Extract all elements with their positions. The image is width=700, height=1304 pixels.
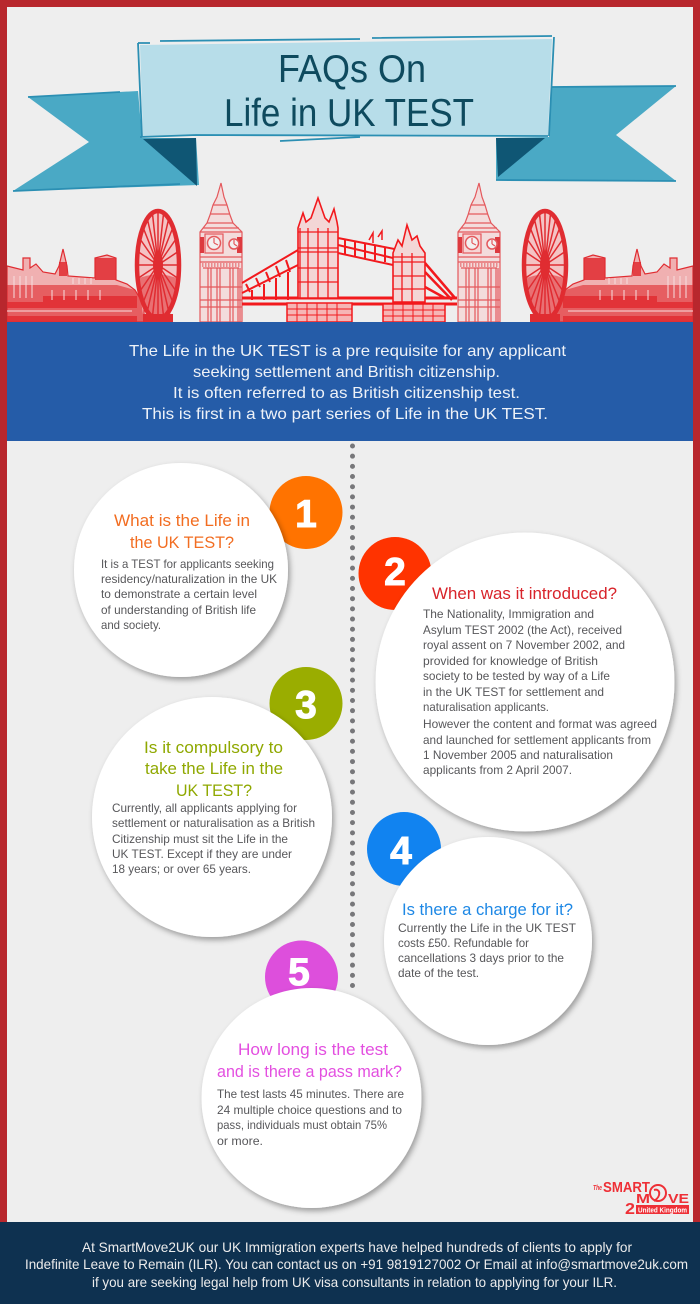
heading 5: and is there a pass mark? — [217, 1062, 402, 1081]
body 1: residency/naturalization in the UK — [101, 572, 277, 586]
body 4: costs £50. Refundable for — [398, 936, 529, 950]
heading 5 — [217, 1040, 402, 1081]
heading 1: the UK TEST? — [130, 533, 234, 552]
intro text — [129, 343, 567, 423]
badge 1 — [270, 476, 342, 549]
badge 5 — [265, 940, 338, 1014]
body 1: of understanding of British life — [101, 603, 256, 617]
banner left fold — [143, 138, 197, 186]
body 2: applicants from 2 April 2007. — [423, 763, 572, 777]
body 5 — [217, 1087, 404, 1148]
dotted timeline — [350, 446, 355, 991]
right Big Ben — [458, 183, 500, 322]
body 2: The Nationality, Immigration and — [423, 607, 594, 621]
body 2: naturalisation applicants. — [423, 700, 549, 714]
footer text: Indefinite Leave to Remain (ILR). You can contact us on +91 9819127002 Or Email at info@smartmove2uk.com — [25, 1256, 688, 1272]
body 5: pass, individuals must obtain 75% — [217, 1118, 387, 1132]
heading 3: Is it compulsory to — [144, 738, 283, 757]
circle 4 — [384, 837, 592, 1045]
banner right tail — [496, 86, 676, 181]
SmartMove2UK logo: VE — [668, 1191, 689, 1206]
left London Eye — [136, 210, 180, 322]
heading 4: Is there a charge for it? — [402, 900, 573, 919]
body 4: cancellations 3 days prior to the — [398, 951, 564, 965]
body 4: date of the test. — [398, 966, 479, 980]
panel: question 2 — [358, 532, 674, 832]
SmartMove2UK logo: SMART — [603, 1179, 650, 1196]
banner left tail — [13, 91, 199, 191]
footer text — [25, 1239, 688, 1290]
circle 2 — [376, 532, 674, 832]
body 1: to demonstrate a certain level — [101, 587, 257, 601]
body 3: Citizenship must sit the Life in the — [112, 832, 288, 846]
intro band — [0, 322, 700, 441]
badge 2 — [358, 537, 432, 610]
SmartMove2UK logo: The — [593, 1185, 602, 1192]
circle 3 — [92, 697, 332, 937]
body 1: and society. — [101, 618, 161, 632]
badge 4: 4 — [390, 830, 412, 873]
circle 5 — [202, 988, 422, 1208]
footer text: At SmartMove2UK our UK Immigration experts have helped hundreds of clients to apply for — [82, 1239, 632, 1255]
body 3 — [112, 801, 315, 876]
body 1: It is a TEST for applicants seeking — [101, 557, 274, 571]
body 3: Currently, all applicants applying for — [112, 801, 297, 815]
title banner — [13, 36, 676, 191]
body 2: society to be tested by way of a Life — [423, 669, 610, 683]
body 2: 1 November 2005 and naturalisation — [423, 748, 613, 762]
body 3: UK TEST. Except if they are under — [112, 847, 292, 861]
title text: FAQs On — [278, 48, 426, 91]
body 2: royal assent on 7 November 2002, and — [423, 638, 625, 652]
right London Eye — [523, 210, 567, 322]
SmartMove2UK logo: M — [636, 1191, 650, 1206]
body 5: The test lasts 45 minutes. There are — [217, 1087, 404, 1101]
heading 3: take the Life in the — [145, 759, 283, 778]
SmartMove2UK logo: 2 — [625, 1201, 635, 1218]
body 5: or more. — [217, 1134, 263, 1148]
title text — [224, 48, 474, 135]
body 4: Currently the Life in the UK TEST — [398, 921, 577, 935]
body 1 — [101, 557, 277, 632]
heading 5: How long is the test — [238, 1040, 388, 1059]
panel: question 1 — [74, 463, 342, 677]
heading 2: When was it introduced? — [432, 584, 617, 603]
right city buildings — [556, 249, 693, 322]
panel: question 5 — [202, 940, 422, 1208]
badge 3 — [270, 667, 342, 740]
heading 3: UK TEST? — [176, 781, 252, 800]
badge 4 — [367, 812, 441, 886]
left Big Ben — [200, 183, 242, 322]
intro text: It is often referred to as British citizenship test. — [173, 385, 520, 402]
intro text: This is first in a two part series of Life in the UK TEST. — [142, 406, 548, 423]
body 2: and launched for settlement applicants from — [423, 733, 651, 747]
circle 1 — [74, 463, 288, 677]
heading 3 — [144, 738, 283, 800]
banner right fold — [496, 138, 545, 177]
SmartMove2UK logo: United Kingdom — [638, 1206, 687, 1214]
body 2: However the content and format was agreed — [423, 717, 657, 731]
badge 2: 2 — [384, 551, 406, 594]
intro text: The Life in the UK TEST is a pre requisite for any applicant — [129, 343, 567, 360]
body 4 — [398, 921, 577, 980]
body 2: in the UK TEST for settlement and — [423, 685, 604, 699]
heading 1 — [114, 511, 250, 552]
badge 3: 3 — [295, 684, 317, 727]
body 5: 24 multiple choice questions and to — [217, 1103, 402, 1117]
SmartMove2UK logo — [593, 1179, 689, 1218]
body 2 — [423, 607, 657, 777]
left city buildings — [7, 249, 144, 322]
heading 1: What is the Life in — [114, 511, 250, 530]
title text: Life in UK TEST — [224, 92, 474, 135]
body 2: provided for knowledge of British — [423, 654, 598, 668]
intro text: seeking settlement and British citizenship. — [193, 364, 500, 381]
panel: question 4 — [367, 812, 592, 1045]
panel: question 3 — [92, 667, 342, 937]
body 3: settlement or naturalisation as a British — [112, 816, 315, 830]
footer — [0, 1222, 700, 1304]
banner sketch strokes — [13, 36, 676, 191]
London skyline illustration — [7, 183, 693, 322]
footer text: if you are seeking legal help from UK visa consultants in relation to applying for your ILR. — [92, 1274, 617, 1290]
Tower Bridge — [242, 198, 457, 322]
badge 5: 5 — [288, 951, 310, 994]
badge 1: 1 — [295, 493, 317, 536]
body 2: Asylum TEST 2002 (the Act), received — [423, 623, 622, 637]
body 3: 18 years; or over 65 years. — [112, 862, 251, 876]
banner centre — [140, 39, 552, 136]
